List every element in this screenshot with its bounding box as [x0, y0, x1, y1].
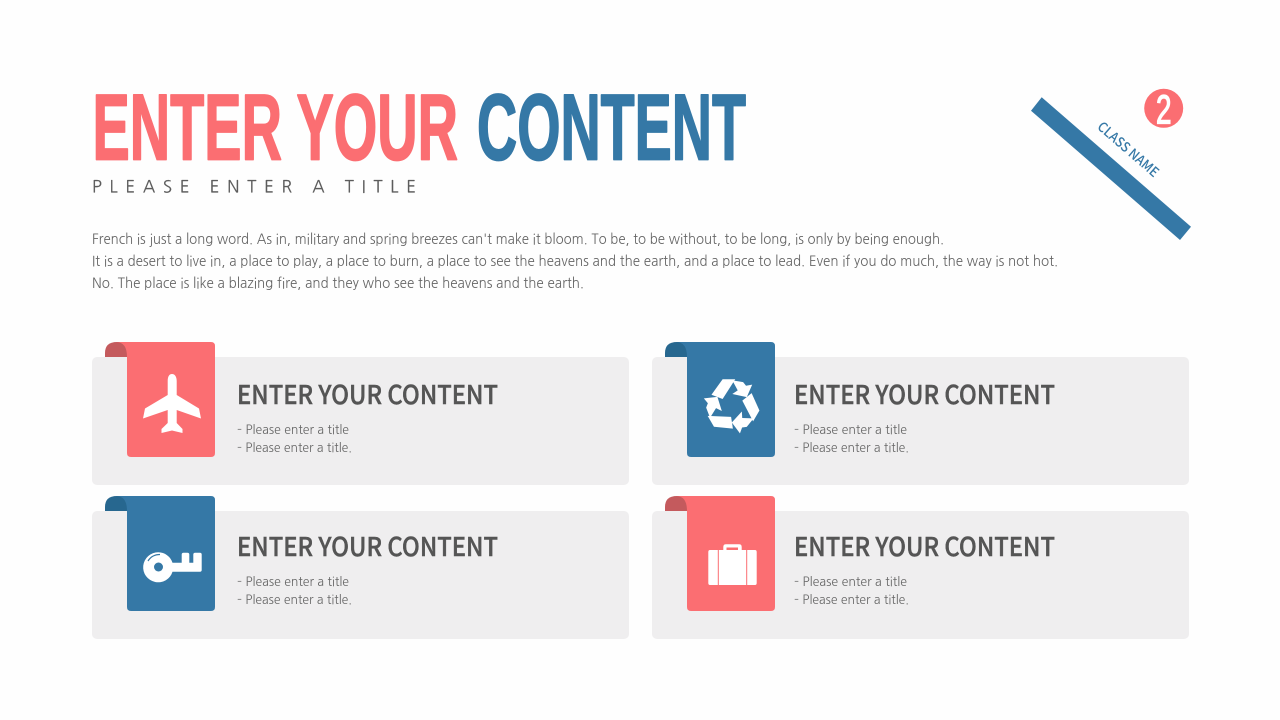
- icon: briefcase: [708, 544, 757, 585]
- card list: [237, 423, 352, 454]
- intro text block: It is a desert to live in, a place to play, a place to burn, a place to see the heavens and the earth, and a place to lead. Even if you do much, the way is not hot.: [92, 254, 1058, 269]
- card list: [794, 575, 909, 606]
- ribbon: [105, 342, 215, 457]
- card list: – Please enter a title.: [237, 441, 352, 454]
- card list: [237, 575, 352, 606]
- panel: card bottom right: [652, 496, 1189, 639]
- icon: key: [143, 552, 202, 582]
- number circle: 2: [1156, 86, 1172, 132]
- ribbon: [665, 342, 775, 457]
- title: ENTER YOUR: [92, 74, 458, 180]
- card heading: ENTER YOUR CONTENT: [237, 375, 498, 412]
- card list: – Please enter a title: [237, 423, 349, 436]
- intro text block: No. The place is like a blazing fire, and they who see the heavens and the earth.: [92, 276, 584, 291]
- card heading: ENTER YOUR CONTENT: [237, 527, 498, 564]
- icon: plane: [143, 374, 201, 433]
- class badge: [1031, 86, 1191, 240]
- panel: card top right: [652, 342, 1189, 485]
- card heading: ENTER YOUR CONTENT: [794, 527, 1055, 564]
- title: CONTENT: [477, 74, 746, 180]
- panel: card bottom left: [92, 496, 629, 639]
- diagonal bar: [1031, 97, 1191, 240]
- card heading: ENTER YOUR CONTENT: [794, 375, 1055, 412]
- ribbon: [665, 496, 775, 611]
- card list: – Please enter a title: [794, 423, 907, 436]
- intro text block: [92, 232, 1058, 291]
- card list: – Please enter a title: [794, 575, 907, 588]
- card list: – Please enter a title: [237, 575, 349, 588]
- card list: – Please enter a title.: [794, 441, 909, 454]
- class name label: CLASS NAME: [1094, 116, 1164, 181]
- card list: – Please enter a title.: [237, 593, 352, 606]
- ribbon: [105, 496, 215, 611]
- icon: recycle: [699, 379, 765, 436]
- card list: [794, 423, 909, 454]
- panel: card top left: [92, 342, 629, 485]
- card list: – Please enter a title.: [794, 593, 909, 606]
- intro text block: French is just a long word. As in, military and spring breezes can't make it bloom. To be, to be without, to be long, is only by being enough.: [92, 232, 944, 247]
- subtitle: PLEASE ENTER A TITLE: [92, 178, 416, 196]
- number circle: [1144, 86, 1183, 132]
